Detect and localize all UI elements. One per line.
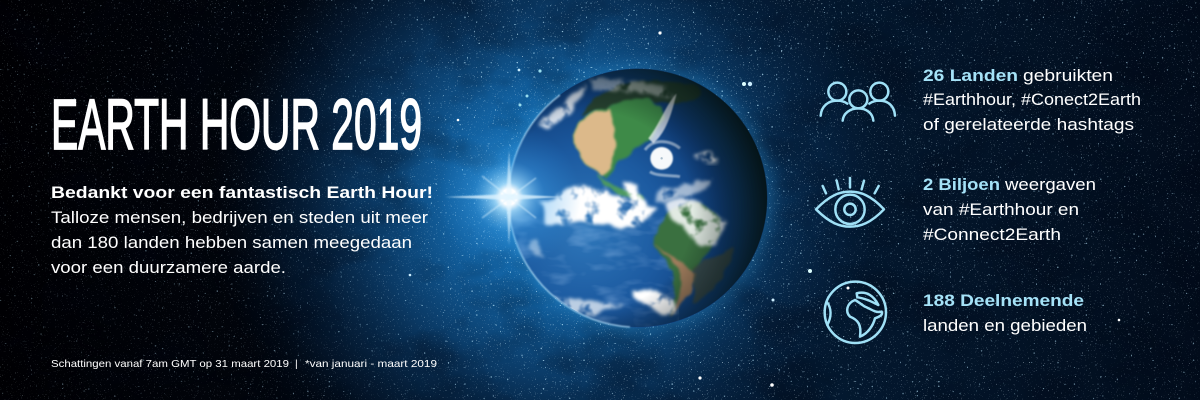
stat text (923, 66, 1141, 134)
footnote: | (295, 358, 298, 370)
footnote: *van januari - maart 2019 (305, 358, 437, 370)
stat: 26 landen (821, 66, 1141, 134)
stat: 2 biljoen (816, 175, 1096, 244)
stat text: weergaven (1004, 175, 1096, 194)
stat: 188 deelnemende (825, 282, 1087, 343)
intro text block: voor een duurzamere aarde. (51, 258, 286, 277)
stat text: 188 Deelnemende (923, 291, 1084, 310)
intro text block: Talloze mensen, bedrijven en steden uit meer (51, 208, 428, 227)
clouds (527, 77, 727, 317)
terminator shadow (535, 69, 767, 327)
continents (573, 80, 733, 317)
stat text: 2 Biljoen (923, 175, 1000, 194)
stat text: gebruikten (1023, 66, 1113, 85)
icon: eye (816, 178, 884, 227)
stat text: #Earthhour, #Conect2Earth (923, 90, 1141, 109)
footnote: Schattingen vanaf 7am GMT op 31 maart 2019 (51, 358, 289, 370)
atmosphere rim (508, 95, 630, 327)
sun flare (437, 125, 581, 269)
footnote (51, 358, 437, 370)
stat text (923, 291, 1087, 335)
stat text: landen en gebieden (923, 316, 1087, 335)
ocean swirls (509, 200, 679, 328)
stat text: of gerelateerde hashtags (923, 115, 1134, 134)
hurricane (650, 147, 673, 170)
stat text (923, 175, 1096, 244)
icon: globe (825, 282, 886, 343)
stat text: #Connect2Earth (923, 225, 1061, 244)
stat text: van #Earthhour en (923, 200, 1079, 219)
stat text: 26 Landen (923, 66, 1018, 85)
intro text block: dan 180 landen hebben samen meegedaan (51, 233, 412, 252)
icon: people (821, 83, 895, 121)
title: EARTH HOUR 2019 (51, 86, 422, 165)
intro text block (51, 183, 433, 277)
planet earth (504, 64, 772, 332)
intro text block: Bedankt voor een fantastisch Earth Hour! (51, 183, 433, 202)
